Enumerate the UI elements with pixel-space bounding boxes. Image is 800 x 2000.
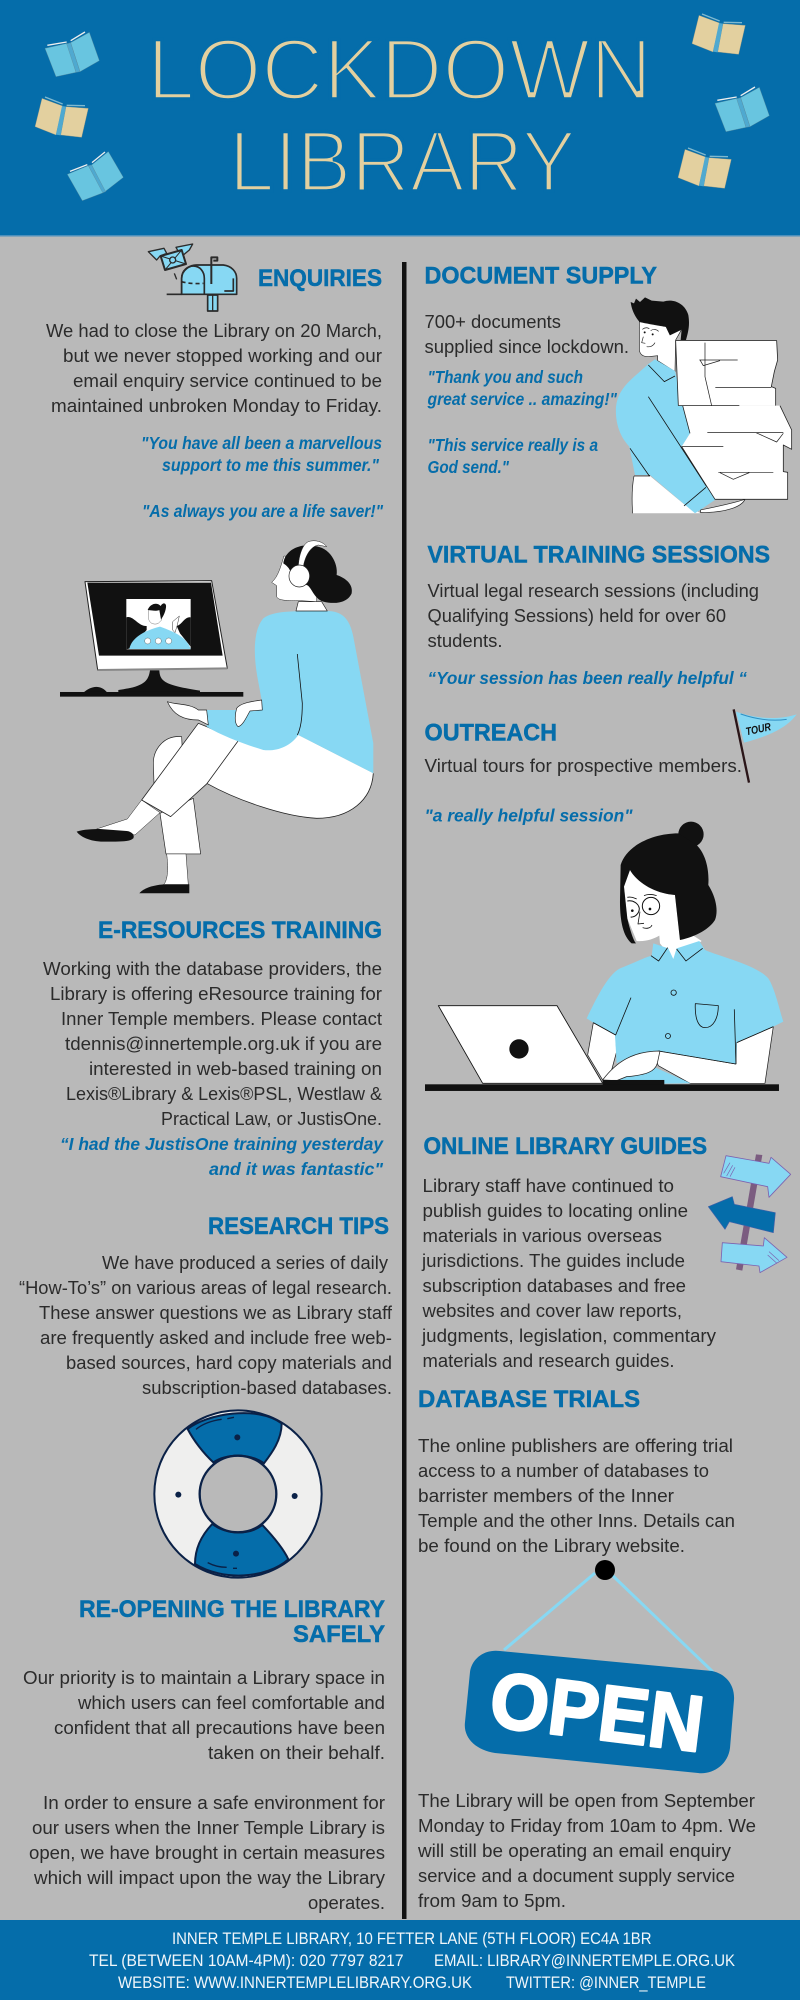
body text — [19, 1252, 393, 1398]
title: LOCKDOWN — [147, 22, 652, 118]
footer: INNER TEMPLE LIBRARY, 10 FETTER LANE (5TH FLOOR) EC4A 1BR — [172, 1930, 652, 1948]
panel: research tips — [19, 1213, 393, 1578]
quotes — [427, 367, 618, 477]
heading: ONLINE LIBRARY GUIDES — [424, 1133, 707, 1160]
desk — [425, 1084, 779, 1091]
heading: VIRTUAL TRAINING SESSIONS — [428, 542, 770, 569]
body text: Inner Temple members. Please contact — [61, 1008, 383, 1029]
body text: confident that all precautions have been — [54, 1717, 385, 1738]
body text: tdennis@innertemple.org.uk if you are — [65, 1033, 382, 1054]
footer — [0, 1920, 800, 2000]
body text: supplied since lockdown. — [424, 336, 629, 357]
panel: opening hours text: The Library will be open from September — [418, 1790, 755, 1811]
heading: DATABASE TRIALS — [418, 1386, 640, 1413]
body text: be found on the Library website. — [418, 1535, 685, 1556]
title — [147, 22, 652, 210]
footer: WEBSITE: WWW.INNERTEMPLELIBRARY.ORG.UK — [118, 1974, 472, 1992]
panel: opening hours text — [417, 1790, 756, 1911]
body text: websites and cover law reports, — [422, 1300, 682, 1321]
figure — [77, 541, 373, 893]
icon: tour flag — [734, 709, 797, 783]
laptop — [438, 1006, 664, 1085]
panel: opening hours text: from 9am to 5pm. — [418, 1890, 566, 1911]
quotes: "Thank you and such — [428, 367, 583, 387]
footer: TWITTER: @INNER_TEMPLE — [506, 1974, 706, 1992]
body text: Virtual legal research sessions (including — [428, 580, 759, 601]
heading: E-RESOURCES TRAINING — [98, 917, 382, 944]
icon: lifebuoy — [154, 1410, 322, 1578]
body text — [418, 1435, 735, 1556]
body text — [23, 1667, 386, 1913]
icon: books left — [35, 32, 123, 201]
body text: Practical Law, or JustisOne. — [161, 1108, 382, 1129]
body text: Temple and the other Inns. Details can — [418, 1510, 735, 1531]
body text: subscription-based databases. — [142, 1377, 392, 1398]
body text: Virtual tours for prospective members. — [424, 755, 742, 776]
body text: taken on their behalf. — [208, 1742, 385, 1763]
body text: jurisdictions. The guides include — [421, 1250, 685, 1271]
icon: tour flag: TOUR — [745, 721, 772, 738]
footer: TEL (BETWEEN 10AM-4PM): 020 7797 8217 — [89, 1952, 404, 1970]
heading — [79, 1596, 385, 1648]
body text: subscription databases and free — [422, 1275, 686, 1296]
body text: Qualifying Sessions) held for over 60 — [428, 605, 726, 626]
body text: We have produced a series of daily — [102, 1252, 389, 1273]
illustration: woman at laptop — [425, 822, 783, 1091]
body text: “How-To’s” on various areas of legal research. — [19, 1277, 392, 1298]
illustration: woman with headset at computer — [60, 541, 373, 893]
body text: barrister members of the Inner — [418, 1485, 674, 1506]
body text: The online publishers are offering trial — [418, 1435, 733, 1456]
quote: and it was fantastic" — [209, 1159, 384, 1179]
quotes: great service .. amazing!" — [427, 389, 618, 409]
body text: In order to ensure a safe environment for — [43, 1792, 385, 1813]
heading: OUTREACH — [424, 720, 557, 747]
panel: database trials — [418, 1386, 735, 1556]
body text: which users can feel comfortable and — [77, 1692, 385, 1713]
quote — [60, 1134, 384, 1179]
body text — [428, 580, 759, 651]
body text: materials and research guides. — [422, 1350, 674, 1371]
panel: enquiries — [46, 244, 384, 521]
body text — [43, 958, 383, 1129]
icon: books right — [678, 14, 769, 188]
icon: mailbox — [148, 244, 237, 311]
body text: are frequently asked and include free web- — [40, 1327, 392, 1348]
quotes: support to me this summer." — [162, 455, 380, 475]
quotes: "You have all been a marvellous — [141, 433, 382, 453]
heading: RESEARCH TIPS — [208, 1213, 389, 1240]
body text: materials in various overseas — [422, 1225, 662, 1246]
panel: online library guides — [421, 1133, 791, 1371]
body text: our users when the Inner Temple Library is — [32, 1817, 385, 1838]
computer — [60, 581, 243, 697]
quotes: "As always you are a life saver!" — [142, 501, 384, 521]
quote: “I had the JustisOne training yesterday — [60, 1134, 384, 1154]
body text: email enquiry service continued to be — [73, 370, 382, 391]
body text: These answer questions we as Library staff — [39, 1302, 393, 1323]
quotes: "This service really is a — [428, 435, 598, 455]
body text: access to a number of databases to — [418, 1460, 709, 1481]
body text: We had to close the Library on 20 March, — [46, 320, 382, 341]
quotes — [141, 433, 384, 521]
body text: maintained unbroken Monday to Friday. — [51, 395, 382, 416]
body text — [421, 1175, 717, 1371]
heading: SAFELY — [293, 1621, 385, 1648]
panel: document supply — [424, 263, 792, 513]
heading: DOCUMENT SUPPLY — [424, 263, 657, 290]
quote: “Your session has been really helpful “ — [428, 668, 747, 688]
heading: ENQUIRIES — [258, 265, 382, 292]
panel: re-opening the library safely — [23, 1596, 386, 1913]
body text: publish guides to locating online — [422, 1200, 688, 1221]
title: LIBRARY — [229, 114, 576, 210]
body text: based sources, hard copy materials and — [66, 1352, 392, 1373]
body text: operates. — [308, 1892, 385, 1913]
quote: "a really helpful session" — [424, 806, 633, 826]
icon: open sign — [465, 1560, 734, 1773]
body text: students. — [428, 630, 502, 651]
body text: Library staff have continued to — [422, 1175, 674, 1196]
quotes: God send." — [428, 457, 510, 477]
header banner — [0, 0, 800, 236]
panel: virtual training sessions — [428, 542, 770, 688]
body text: Lexis®Library & Lexis®PSL, Westlaw & — [66, 1083, 383, 1104]
illustration: man carrying papers — [616, 297, 792, 513]
icon: open sign: OPEN — [485, 1654, 709, 1769]
body text: judgments, legislation, commentary — [421, 1325, 717, 1346]
panel: e-resources training — [43, 917, 384, 1179]
icon: direction arrows — [708, 1154, 791, 1273]
body text: interested in web-based training on — [89, 1058, 382, 1079]
body text: 700+ documents — [424, 311, 561, 332]
body text: open, we have brought in certain measures — [29, 1842, 385, 1863]
panel: opening hours text: service and a document supply service — [418, 1865, 735, 1886]
panel: opening hours text: Monday to Friday from 10am to 4pm. We — [418, 1815, 756, 1836]
body text: but we never stopped working and our — [63, 345, 382, 366]
body text: Library is offering eResource training for — [50, 983, 382, 1004]
body text: Working with the database providers, the — [43, 958, 382, 979]
column divider — [402, 262, 406, 1919]
body text: Our priority is to maintain a Library space in — [23, 1667, 385, 1688]
body text — [424, 311, 629, 357]
body text: which will impact upon the way the Library — [33, 1867, 386, 1888]
heading: RE-OPENING THE LIBRARY — [79, 1596, 385, 1623]
body text — [46, 320, 382, 416]
panel: outreach — [424, 709, 797, 826]
panel: opening hours text: will still be operating an email enquiry — [417, 1840, 732, 1861]
footer: EMAIL: LIBRARY@INNERTEMPLE.ORG.UK — [434, 1952, 735, 1970]
